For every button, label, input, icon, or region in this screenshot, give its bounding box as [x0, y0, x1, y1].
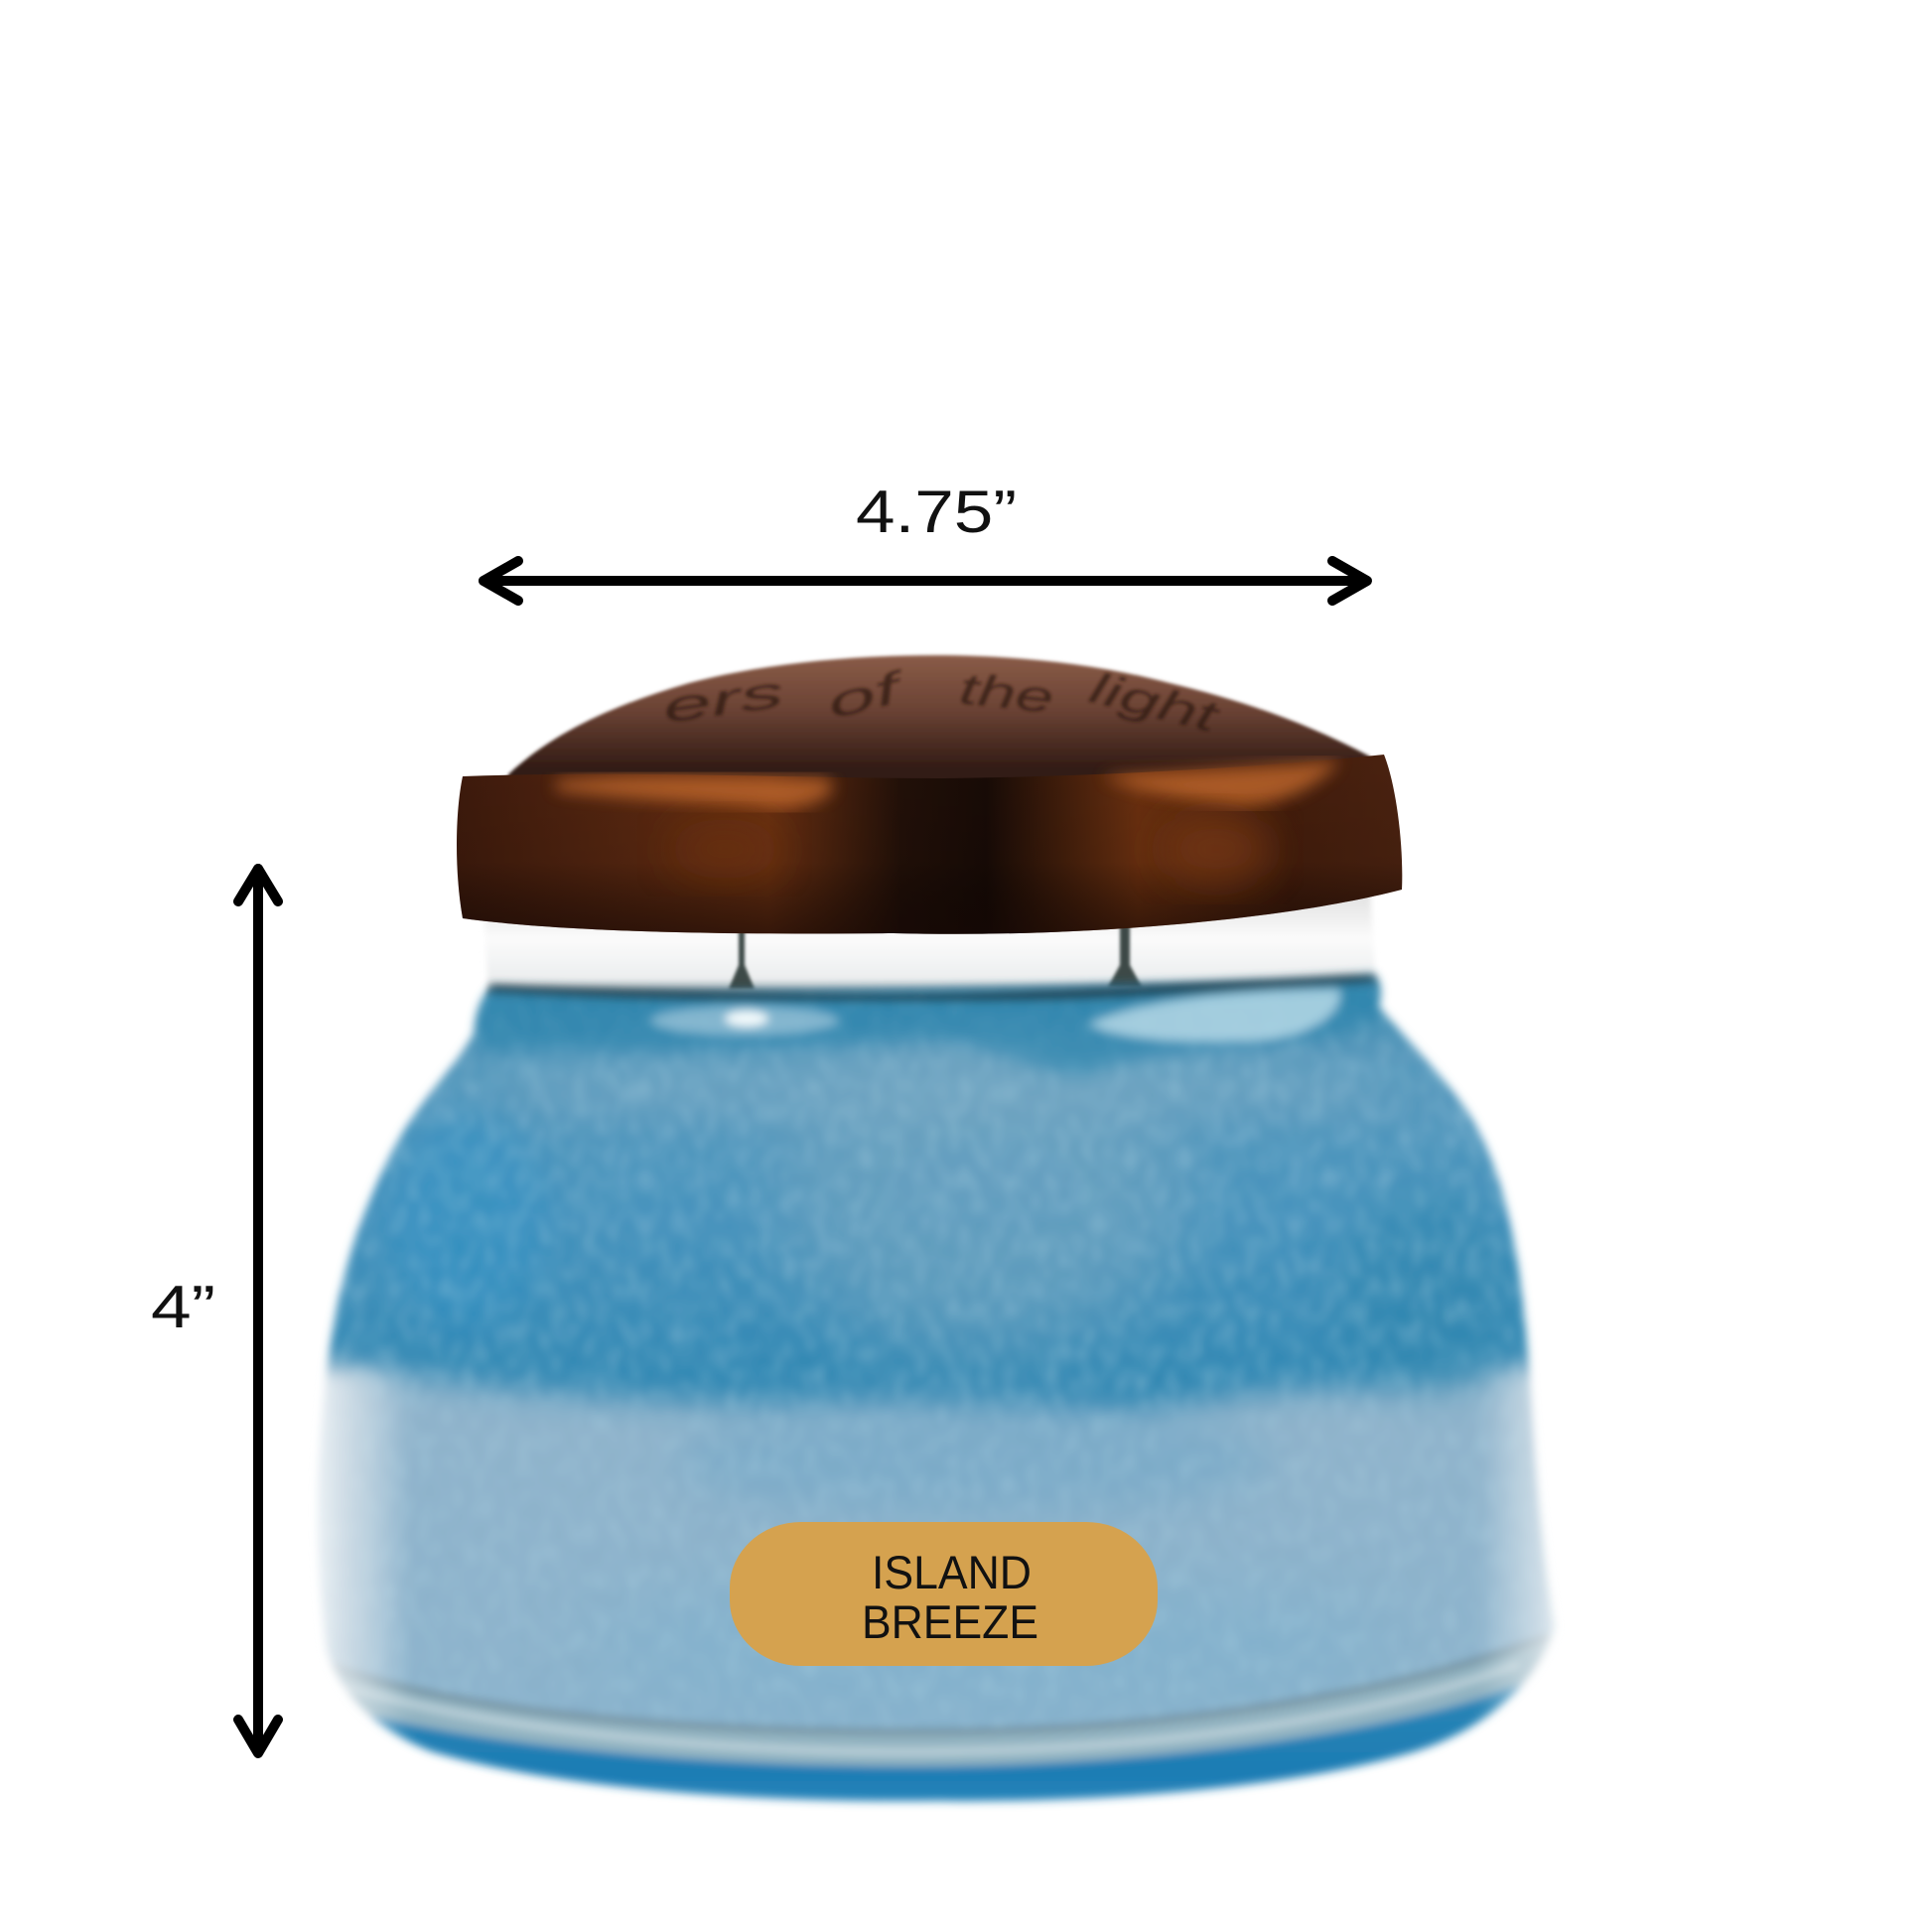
wax highlight core — [725, 1011, 768, 1027]
rim lower shade — [457, 755, 1402, 934]
label text — [862, 1546, 1038, 1648]
glass neck — [484, 889, 1376, 999]
infographic: candle with dimensions — [153, 490, 1557, 1809]
glass base — [371, 1658, 1512, 1765]
width label: 4.75” — [856, 479, 1017, 545]
copper lid — [457, 655, 1402, 934]
blue base band — [371, 1683, 1521, 1808]
height label: 4” — [151, 1274, 215, 1340]
embossed lid lettering: the — [957, 664, 1056, 723]
lid dome — [508, 655, 1370, 794]
label text: BREEZE — [862, 1595, 1038, 1648]
base rim line — [328, 1636, 1549, 1731]
collar deep blue — [477, 973, 1380, 1077]
label text: ISLAND — [872, 1546, 1032, 1598]
base highlight lines — [343, 1664, 1519, 1751]
rim warm glow right — [1162, 814, 1271, 884]
embossed lid lettering: ers — [660, 667, 786, 733]
embossed lid lettering: of — [823, 661, 912, 729]
neck dark line — [486, 977, 1376, 999]
embossed lid lettering — [660, 661, 1224, 743]
wax highlight right — [1087, 989, 1340, 1041]
left bright blue patch — [386, 1107, 546, 1294]
rim highlight right — [1102, 760, 1340, 806]
wicks — [729, 923, 1142, 989]
rim highlight left — [556, 775, 833, 809]
label: Island Breeze — [730, 1522, 1158, 1666]
lower deeper patch — [701, 1620, 1293, 1678]
lower band drip — [687, 1422, 1261, 1515]
soft glass edges — [313, 1356, 1560, 1739]
upper blue wax — [298, 963, 1588, 1413]
candle jar — [298, 889, 1588, 1847]
width arrow — [483, 561, 1367, 601]
wax body — [298, 963, 1588, 1847]
wax highlight left — [650, 1006, 839, 1035]
lower pale wax — [318, 1340, 1557, 1769]
centre pale patch — [774, 1033, 1191, 1350]
rim warm glow left — [670, 819, 779, 879]
right deep patch — [1340, 1191, 1519, 1390]
height arrow — [238, 869, 278, 1753]
mottled texture — [330, 1001, 1525, 1696]
embossed lid lettering: light — [1085, 663, 1224, 743]
collar pale band — [496, 1051, 1390, 1123]
lid rim — [457, 755, 1402, 934]
